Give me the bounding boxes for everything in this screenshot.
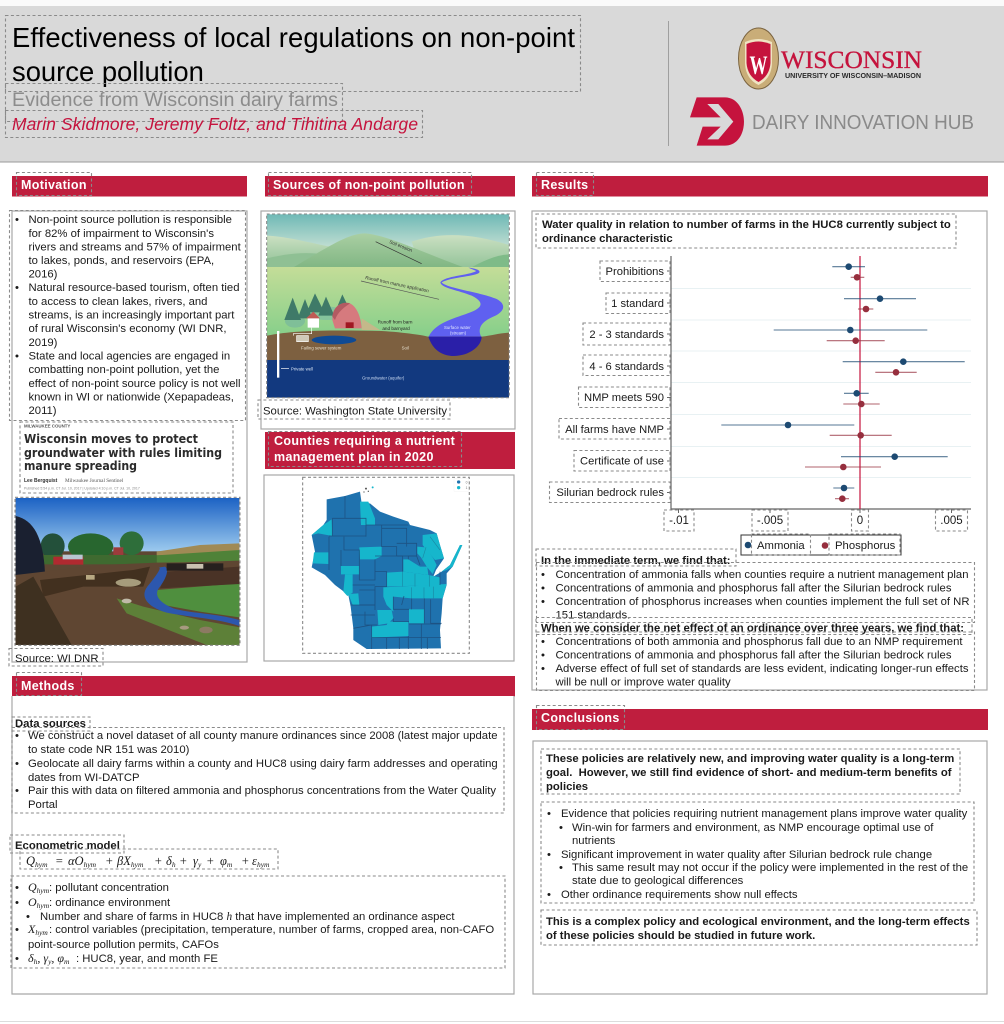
x-axis labels (664, 510, 968, 531)
chart legend (741, 534, 901, 555)
heading bar: Motivation (12, 172, 247, 196)
x-axis labels: -.005 (757, 515, 783, 527)
motivation text: • (15, 214, 19, 226)
equation: hym (257, 860, 270, 869)
diagram: runoff pathways: (stream) (450, 331, 467, 336)
diagram: runoff pathways: Runoff from manure application (365, 275, 430, 294)
model variable list: δ (28, 951, 34, 965)
immediate-term findings: Concentration of ammonia falls when counties require a nutrient management plan (556, 569, 968, 581)
x-axis labels: .005 (940, 515, 963, 527)
equation: + (105, 854, 113, 868)
equation (20, 849, 278, 869)
y-axis labels: 2 - 3 standards (589, 329, 664, 341)
diagram: runoff pathways: Soil (402, 345, 409, 350)
heading bar: Counties requiring a nutrient management plan (265, 432, 515, 469)
conclusions list: Significant improvement in water quality after Silurian bedrock rule change (561, 849, 932, 861)
header divider (668, 21, 669, 146)
motivation text: to access to clean lakes, rivers, and (28, 296, 207, 308)
diagram source caption: Source: Washington State University (263, 406, 447, 418)
conclusions list: • (559, 822, 563, 834)
equation: hym (131, 860, 144, 869)
model variable list: : HUC8, year, and month FE (76, 953, 218, 965)
motivation text: streams, is an increasingly important part (28, 310, 235, 322)
data sources list: • (15, 730, 19, 742)
title: Effectiveness of local regulations on non-point (12, 22, 575, 53)
motivation text: Non-point source pollution is responsible (28, 214, 232, 226)
y-axis labels: 1 standard (611, 298, 664, 310)
diagram: runoff pathways: Failing sewer system (301, 345, 342, 350)
equation: + (206, 854, 214, 868)
y-axis labels: Certificate of use (580, 456, 664, 468)
model variable list: • (15, 924, 19, 936)
motivation text: known in WI or nationwide (Xepapadeas, (28, 392, 234, 404)
model variable list: : pollutant concentration (49, 882, 169, 894)
heading bar: Methods (12, 672, 515, 696)
map legend: 1 (466, 486, 468, 490)
conclusions list: Evidence that policies requiring nutrient management plans improve water quality (561, 808, 968, 820)
panel: county map (264, 475, 514, 661)
ammonia estimates (721, 263, 965, 491)
equation: + (241, 854, 249, 868)
conclusions lead statement: These policies are relatively new, and improving water quality is a long-term (546, 753, 954, 765)
conclusions list: Win-win for farmers and environment, as NMP encourage optimal use of (572, 822, 934, 834)
model variable list: • (15, 897, 19, 909)
closing statement: of these policies should be studied in future work. (546, 930, 815, 942)
conclusions list: • (559, 862, 563, 874)
model variable list: O (28, 895, 37, 909)
equation: hym (84, 860, 97, 869)
chart legend: Phosphorus (835, 540, 896, 552)
chart heading (536, 214, 956, 248)
phosphorus estimates (805, 274, 917, 502)
motivation text: • (15, 282, 19, 294)
conclusions list: This same result may not occur if the policy were implemented in the rest of the (572, 862, 968, 874)
immediate-term findings (536, 549, 974, 622)
net-effect findings: When we consider the net effect of an ordinance over three years, we find that: (541, 622, 964, 634)
data sources list: • (15, 785, 19, 797)
model variable list: • (15, 882, 19, 894)
immediate-term findings: Concentration of phosphorus increases when counties implement the full set of NR (556, 596, 970, 608)
equation: = (55, 854, 63, 868)
data sources list: Portal (28, 799, 58, 811)
conclusions lead statement: policies (546, 781, 588, 793)
photo source caption (9, 648, 103, 666)
model variable list (11, 876, 505, 968)
y-axis labels: Prohibitions (606, 266, 664, 278)
model variable list: • (15, 953, 19, 965)
equation: ε (252, 854, 257, 868)
chart heading: Water quality in relation to number of farms in the HUC8 currently subject to (542, 219, 951, 231)
title (6, 16, 580, 92)
net-effect findings: • (541, 636, 545, 648)
motivation text: State and local agencies are engaged in (28, 350, 230, 362)
model variable list: point-source pollution permits, CAFOs (28, 939, 219, 951)
y-axis labels: NMP meets 590 (584, 392, 664, 404)
heading bar: Results (532, 172, 988, 196)
model variable list: hym (35, 928, 48, 937)
motivation text: for 82% of impairment to Wisconsin's (28, 228, 214, 240)
motivation text (15, 214, 242, 417)
conclusions list: • (547, 849, 551, 861)
heading bar: Sources of non-point pollution: Sources of non-point pollution (273, 178, 465, 192)
model variable list: , φ (51, 951, 64, 965)
heading bar: Conclusions: Conclusions (541, 711, 620, 725)
y-axis labels (550, 261, 670, 502)
panel: results (532, 211, 987, 690)
chart legend: Ammonia (757, 540, 805, 552)
econometric model heading: Econometric model (15, 840, 120, 852)
panel: motivation (9, 210, 247, 666)
heading bar: Sources of non-point pollution (265, 172, 515, 196)
equation: Q (26, 854, 35, 868)
closing statement: This is a complex policy and ecological environment, and the long-term effects (546, 916, 970, 928)
newspaper clipping: Published 5:54 p.m. CT Jul. 10, 2017 | Updated 4:10 p.m. CT Jul. 10, 2017 (24, 486, 140, 490)
diagram: runoff pathways: Runoff from barn (378, 320, 413, 325)
motivation text: combatting non-point pollution, yet the (28, 364, 219, 376)
newspaper clipping (20, 422, 233, 493)
heading bar: Counties requiring a nutrient management plan: Counties requiring a nutrient (274, 434, 456, 448)
diagram: runoff pathways: Soil erosion (389, 239, 413, 253)
immediate-term findings: • (541, 596, 545, 608)
logo: University of Wisconsin-Madison: UNIVERSITY OF WISCONSIN–MADISON (785, 71, 921, 80)
logo: Dairy Innovation Hub (689, 97, 974, 146)
x-axis labels: -.01 (669, 515, 689, 527)
logo: Dairy Innovation Hub: DAIRY INNOVATION HUB (752, 111, 974, 134)
conclusions list: • (547, 808, 551, 820)
model variable list: X (28, 922, 35, 936)
model variable list: : control variables (precipitation, temperature, number of farms, cropped area, non-CAFO (49, 924, 494, 936)
conclusions list (541, 802, 974, 903)
diagram: runoff pathways: Groundwater (aquifer) (362, 375, 405, 380)
immediate-term findings: • (541, 582, 545, 594)
net-effect findings: • (541, 650, 545, 662)
map: Wisconsin counties (303, 477, 469, 653)
motivation text: of rural Wisconsin's economy (WI DNR, (28, 323, 227, 335)
immediate-term findings: 151 standards. (556, 610, 630, 622)
data sources list: We construct a novel dataset of all county manure ordinances since 2008 (latest major update (28, 730, 498, 742)
motivation text: 2011) (28, 405, 57, 417)
net-effect findings (536, 618, 974, 690)
net-effect findings: will be null or improve water quality (554, 676, 731, 688)
subtitle: Evidence from Wisconsin dairy farms (12, 89, 338, 111)
model variable list: h (34, 957, 38, 966)
data sources list: Geolocate all dairy farms within a county and HUC8 using dairy farm addresses and operating (28, 758, 498, 770)
subtitle (6, 84, 342, 122)
panel: conclusions (533, 741, 987, 994)
model variable list: • (26, 911, 30, 923)
data sources heading: Data sources (15, 718, 86, 730)
net-effect findings: Concentrations of ammonia and phosphorus fall after the Silurian bedrock rules (556, 650, 952, 662)
header band (0, 6, 1004, 162)
model variable list: hym (37, 901, 50, 910)
heading bar: Counties requiring a nutrient management plan: management plan in 2020 (274, 450, 434, 464)
y-axis labels: Silurian bedrock rules (556, 487, 664, 499)
map legend (454, 479, 469, 491)
net-effect findings: Concentrations of both ammonia and phosphorus fall due to an NMP requirement (556, 636, 963, 648)
equation: φ (220, 854, 227, 868)
motivation text: rivers and streams and 57% of impairment (28, 242, 242, 254)
zero reference line (859, 256, 861, 509)
diagram: runoff pathways: Private well (291, 366, 313, 371)
equation: + (154, 854, 162, 868)
motivation text: 2019) (28, 337, 58, 349)
newspaper clipping: MILWAUKEE COUNTY (24, 424, 70, 428)
conclusions lead statement: goal. However, we still find evidence of short- and medium-term benefits of (546, 767, 952, 779)
closing statement (541, 910, 977, 945)
y-axis labels: All farms have NMP (565, 424, 664, 436)
motivation text: 2016) (28, 268, 58, 280)
newspaper clipping: Wisconsin moves to protect (24, 431, 198, 446)
equation: αO (68, 854, 84, 868)
equation: βX (116, 854, 132, 868)
model variable list: : ordinance environment (49, 897, 171, 909)
immediate-term findings: In the immediate term, we find that: (541, 555, 731, 567)
conclusions lead statement (541, 749, 960, 794)
conclusions list: Other ordinance requirements show null effects (561, 889, 798, 901)
model variable list: Q (28, 880, 37, 894)
data sources list: to state code NR 151 was 2010) (28, 744, 190, 756)
motivation text: • (15, 350, 19, 362)
diagram: runoff pathways: Surface water (444, 325, 471, 330)
motivation text: effect of non-point source policy is not well (28, 378, 241, 390)
conclusions list: state due to geological differences (572, 875, 744, 887)
econometric model heading (10, 835, 124, 853)
equation: + (179, 854, 187, 868)
photo: farm stream (15, 497, 240, 645)
heading bar: Motivation: Motivation (21, 178, 87, 192)
photo source caption: Source: WI DNR (15, 653, 98, 665)
data sources list: Pair this with data on filtered ammonia and phosphorus concentrations from the Water Quality (28, 785, 496, 797)
conclusions list: • (547, 889, 551, 901)
newspaper clipping: Milwaukee Journal Sentinel (65, 478, 124, 484)
motivation text: to lakes, ponds, and reservoirs (EPA, (28, 255, 214, 267)
immediate-term findings: Concentrations of ammonia and phosphorus fall after the Silurian bedrock rules (556, 582, 952, 594)
net-effect findings: Adverse effect of full set of standards are less evident, indicating longer-run effects (556, 663, 969, 675)
equation: y (197, 860, 202, 869)
diagram: runoff pathways (267, 214, 509, 398)
newspaper clipping: groundwater with rules limiting (24, 445, 222, 460)
data sources list: • (15, 758, 19, 770)
title: source pollution (12, 56, 204, 87)
newspaper clipping: manure spreading (24, 458, 137, 473)
diagram source caption (258, 400, 450, 419)
heading bar: Conclusions (532, 706, 988, 730)
net-effect findings: • (541, 663, 545, 675)
panel: sources diagram (258, 211, 515, 429)
newspaper clipping: Lee Bergquist (24, 478, 58, 484)
model variable list: Number and share of farms in HUC8 h that have implemented an ordinance aspect (40, 911, 455, 923)
chart heading: ordinance characteristic (542, 233, 673, 245)
model variable list: hym (37, 886, 50, 895)
data sources list (12, 728, 504, 813)
model variable list: y (47, 957, 52, 966)
logo: University of Wisconsin-Madison: WISCONSIN (781, 45, 922, 74)
equation: h (172, 860, 176, 869)
equation: hym (35, 860, 48, 869)
immediate-term findings: • (541, 569, 545, 581)
coefficient plot (550, 256, 971, 555)
equation: δ (166, 854, 172, 868)
x-axis labels: 0 (857, 515, 863, 527)
heading bar: Methods: Methods (21, 679, 75, 693)
map legend: 0 (466, 480, 468, 484)
equation: m (227, 860, 233, 869)
equation: γ (193, 854, 199, 868)
conclusions list: nutrients (572, 835, 616, 847)
heading bar: Results: Results (541, 178, 588, 192)
panel: methods (10, 696, 514, 994)
logo: University of Wisconsin-Madison (738, 28, 922, 89)
motivation text: Natural resource-based tourism, often tied (28, 282, 239, 294)
authors: Marin Skidmore, Jeremy Foltz, and Tihitina Andarge (12, 114, 418, 134)
model variable list: , γ (37, 951, 48, 965)
data sources list: dates from WI-DATCP (28, 772, 140, 784)
diagram: runoff pathways: and barnyard (382, 326, 410, 331)
logo: University of Wisconsin-Madison: W (750, 51, 768, 80)
y-axis labels: 4 - 6 standards (589, 361, 664, 373)
model variable list: m (64, 957, 70, 966)
